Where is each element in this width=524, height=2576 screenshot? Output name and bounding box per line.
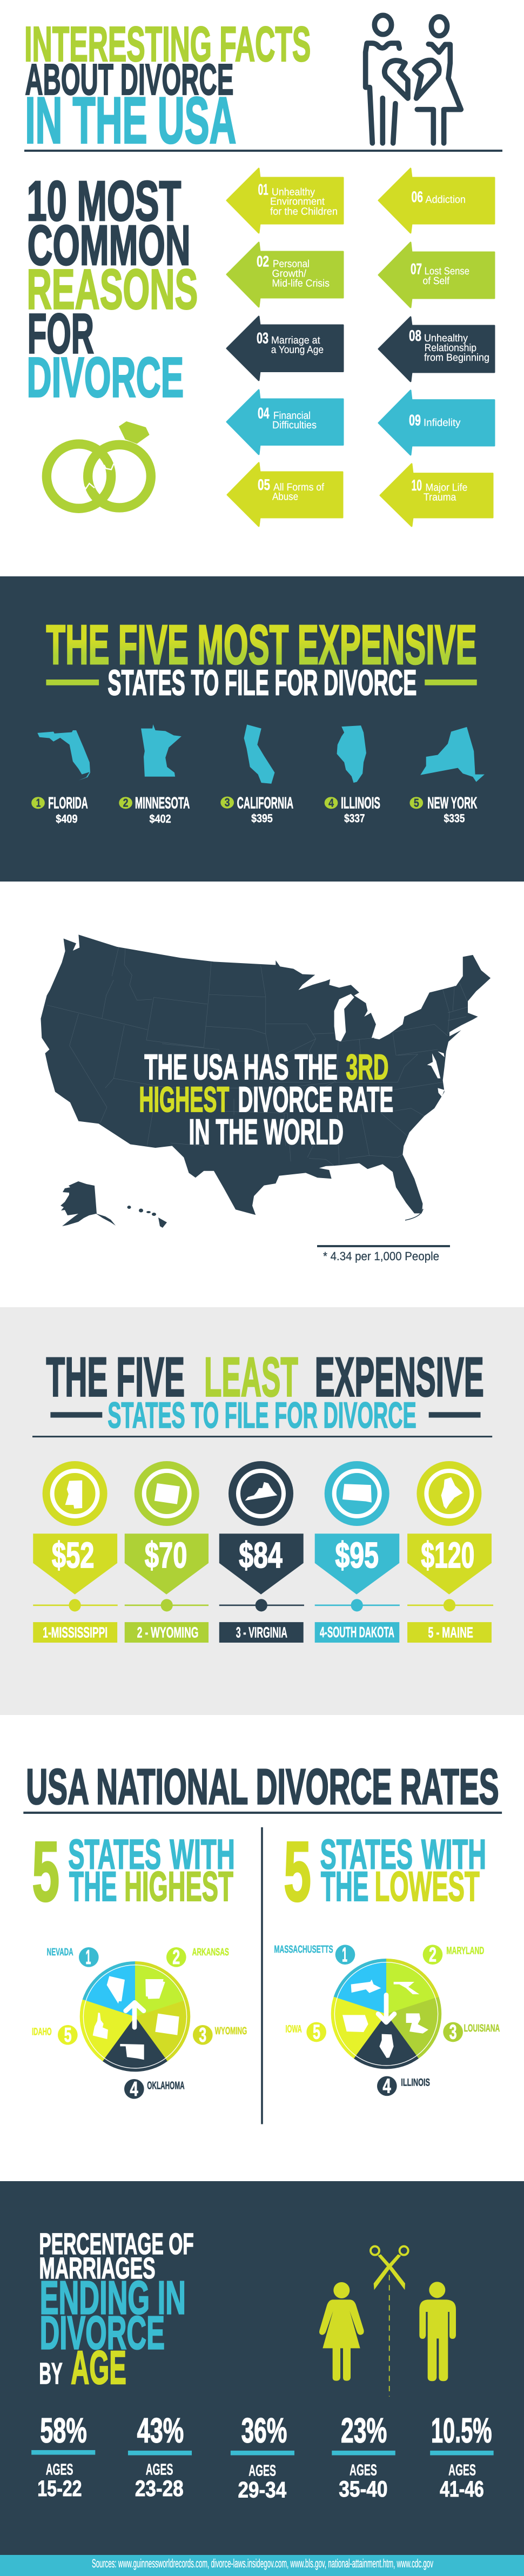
column: Virginia: 3 - VIRGINIA xyxy=(236,1624,287,1641)
legend: Wyoming: WYOMING xyxy=(215,2025,247,2036)
legend: Iowa xyxy=(285,2021,326,2043)
heading: 5 states with the lowest xyxy=(284,1824,486,1919)
heading: 10 most common reasons for divorce: FOR xyxy=(28,302,94,365)
state: Florida xyxy=(31,730,90,825)
state: Illinois: 4 xyxy=(328,796,334,809)
heading: 5 states with the highest xyxy=(32,1824,235,1919)
chart: lowest rate states wheel xyxy=(274,1943,500,2097)
icon: woman xyxy=(319,2282,364,2381)
arrow 04: Difficulties xyxy=(272,420,317,431)
stat: ages 15-22: 58% xyxy=(40,2411,87,2450)
arrow 09: Infidelity xyxy=(424,418,461,429)
panel: USA map xyxy=(41,934,491,1263)
panel: 10 most common reasons: REASONS xyxy=(26,258,198,321)
legend: Iowa: 5 xyxy=(313,2021,320,2043)
stat: ages 41-46: AGES xyxy=(448,2461,476,2479)
arrow 02 xyxy=(227,243,343,307)
heading: the five least expensive: THE FIVE xyxy=(46,1346,185,1408)
state: New York: 5 xyxy=(414,796,419,809)
stat: ages 23-28 xyxy=(128,2411,192,2501)
heading: the five most expensive xyxy=(46,613,477,703)
footer: sources xyxy=(0,2555,524,2576)
map callout text: HIGHEST xyxy=(139,1080,229,1119)
panel: percentage of marriages ending in divorce by age xyxy=(0,2181,524,2555)
legend: Illinois: ILLINOIS xyxy=(401,2076,430,2088)
column: Virginia: $84 xyxy=(239,1535,283,1575)
icon: broken wedding rings xyxy=(46,421,151,508)
heading: 5 states with the highest: STATES xyxy=(68,1831,161,1878)
arrow 06: Addiction xyxy=(426,194,466,206)
legend: Arkansas: 2 xyxy=(172,1946,180,1968)
legend: Nevada: NEVADA xyxy=(47,1946,73,1958)
heading: the five least expensive xyxy=(32,1346,492,1437)
panel: five least expensive states xyxy=(0,1307,524,1715)
arrow 02: 02 xyxy=(257,253,269,270)
arrow 02: Personal xyxy=(273,259,310,270)
column: Mississippi xyxy=(33,1461,118,1643)
state: Minnesota xyxy=(119,724,190,825)
panel: five most expensive states xyxy=(0,576,524,882)
panel: 10 most common reasons: 10 MOST xyxy=(26,170,181,232)
arrow 04 xyxy=(227,390,343,454)
legend: Nevada xyxy=(47,1946,99,1968)
legend: Iowa: IOWA xyxy=(285,2023,302,2035)
state: California: $395 xyxy=(251,812,273,825)
arrow 01: Unhealthy xyxy=(272,186,315,198)
map callout text xyxy=(139,1047,393,1152)
heading: percentage of marriages: DIVORCE xyxy=(40,2306,165,2359)
legend: Illinois xyxy=(377,2075,430,2097)
panel: national divorce rates: HIGHEST xyxy=(124,1863,233,1910)
state: Illinois xyxy=(325,725,380,825)
panel: 10 most common reasons xyxy=(26,169,494,526)
legend: Louisiana: 3 xyxy=(449,2021,457,2043)
heading: 5 states with the lowest: 5 xyxy=(284,1824,311,1919)
column: Wyoming xyxy=(125,1461,209,1643)
icon: scissors xyxy=(371,2247,408,2397)
panel: national divorce rates: WITH xyxy=(170,1831,235,1878)
stat: ages 35-40: 35-40 xyxy=(339,2477,388,2501)
column: Virginia xyxy=(219,1461,304,1643)
arrow 10: Major Life xyxy=(426,482,467,494)
panel: percentage of marriages ending in divorce by age: PERCENTAGE OF xyxy=(39,2227,194,2261)
arrow 10: 10 xyxy=(412,477,422,494)
stat: ages 41-46: 41-46 xyxy=(440,2477,484,2501)
column: Mississippi: $52 xyxy=(52,1535,94,1575)
arrow 03: 03 xyxy=(257,329,268,347)
legend: Idaho: 5 xyxy=(64,2023,72,2046)
icon: man xyxy=(419,2282,456,2381)
legend: Nevada: 1 xyxy=(85,1946,91,1968)
legend: Oklahoma xyxy=(124,2077,185,2100)
heading: USA national divorce rates xyxy=(23,1759,502,2124)
stat: ages 23-28: AGES xyxy=(146,2460,173,2478)
state: Florida: $409 xyxy=(56,812,78,825)
state: Minnesota: 2 xyxy=(123,796,129,809)
arrow 07: of Self xyxy=(422,275,450,287)
panel: five least expensive states: 4-SOUTH DAKOTA xyxy=(320,1624,394,1640)
heading: percentage of marriages: MARRIAGES xyxy=(39,2251,156,2285)
title xyxy=(24,16,311,157)
stat: ages 35-40: AGES xyxy=(350,2461,377,2479)
arrow 07 xyxy=(379,243,494,307)
map: Florida keys curve xyxy=(405,1209,423,1220)
state: New York: $335 xyxy=(444,812,465,825)
state: California xyxy=(220,724,293,825)
heading: the five least expensive: LEAST xyxy=(204,1346,298,1408)
stats by age xyxy=(31,2411,494,2502)
column: South Dakota: $95 xyxy=(335,1535,379,1575)
heading: 5 states with the highest: THE xyxy=(69,1863,117,1910)
arrow 01 xyxy=(227,169,343,233)
stat: ages 29-34: 36% xyxy=(241,2411,287,2450)
stat: ages 15-22 xyxy=(31,2411,95,2501)
legend: Wyoming xyxy=(193,2023,247,2046)
stat: ages 41-46 xyxy=(430,2411,494,2501)
legend: Oklahoma: 4 xyxy=(130,2077,138,2100)
state maps and costs xyxy=(31,724,485,825)
header panel xyxy=(24,15,502,157)
column: Wyoming: 2 - WYOMING xyxy=(137,1624,198,1641)
arrow 10: Trauma xyxy=(424,492,456,503)
state maps and costs: ILLINOIS xyxy=(341,794,380,812)
stat: ages 15-22: AGES xyxy=(46,2460,73,2478)
heading: 10 most common reasons for divorce xyxy=(26,170,198,409)
state: California: 3 xyxy=(225,796,230,809)
heading: percentage of marriages: BY xyxy=(39,2357,63,2390)
arrow 08: Relationship xyxy=(425,342,476,354)
legend: Massachusetts xyxy=(274,1943,355,1966)
arrow 10 xyxy=(380,464,493,526)
state maps and costs: MINNESOTA xyxy=(135,794,190,812)
heading: percentage of marriages: AGE xyxy=(71,2341,126,2394)
stat: ages 23-28: 43% xyxy=(137,2411,184,2450)
panel: 10 most common reasons: COMMON xyxy=(28,214,191,277)
legend: Maryland: 2 xyxy=(429,1943,436,1966)
legend: Arkansas: ARKANSAS xyxy=(192,1946,229,1958)
legend: Maryland: MARYLAND xyxy=(446,1945,484,1956)
stat: ages 29-34 xyxy=(231,2411,294,2502)
arrow 04: 04 xyxy=(258,405,270,422)
state: Florida: 1 xyxy=(36,796,41,809)
legend: Wyoming: 3 xyxy=(199,2023,206,2046)
arrow 01: for the Children xyxy=(270,206,338,217)
stat: ages 29-34: AGES xyxy=(248,2461,276,2479)
stat: ages 35-40 xyxy=(332,2411,395,2501)
state: Minnesota: $402 xyxy=(150,812,171,825)
map: contiguous USA xyxy=(41,934,491,1215)
column: South Dakota xyxy=(315,1461,400,1643)
heading: 5 states with the highest: 5 xyxy=(32,1824,59,1919)
map: Hawaii xyxy=(127,1206,167,1228)
state maps and costs: FLORIDA xyxy=(48,794,88,812)
stat: ages 23-28: 23-28 xyxy=(135,2476,184,2501)
arrow 03: a Young Age xyxy=(271,344,324,355)
arrow 07: 07 xyxy=(411,260,422,278)
column: Wyoming: $70 xyxy=(145,1535,187,1575)
arrow 05: All Forms of xyxy=(273,482,325,493)
heading: percentage of marriages xyxy=(39,2227,194,2394)
arrow 09: 09 xyxy=(409,412,421,429)
arrow 06: 06 xyxy=(412,189,423,206)
arrow 05: Abuse xyxy=(272,492,298,503)
legend: Louisiana xyxy=(443,2021,500,2043)
arrow 05: 05 xyxy=(258,476,270,494)
legend: Oklahoma: OKLAHOMA xyxy=(147,2079,185,2091)
arrow 05 xyxy=(227,463,342,526)
legend: Arkansas xyxy=(166,1946,229,1968)
panel: percentage of marriages ending in divorce by age: ENDING IN xyxy=(40,2271,186,2324)
arrow 09 xyxy=(379,391,494,455)
state maps and costs: CALIFORNIA xyxy=(237,794,293,812)
legend: Maryland xyxy=(423,1943,484,1966)
legend: Massachusetts: 1 xyxy=(342,1943,347,1966)
stat: ages 29-34: 29-34 xyxy=(238,2477,286,2502)
arrow 08 xyxy=(379,317,494,381)
legend: Idaho xyxy=(32,2023,78,2046)
legend: Illinois: 4 xyxy=(382,2075,391,2097)
legend: Massachusetts: MASSACHUSETTS xyxy=(274,1943,333,1955)
arrow 01: 01 xyxy=(258,181,268,199)
state: Illinois: $337 xyxy=(344,812,365,825)
arrow 06 xyxy=(379,169,494,233)
arrow 07: Lost Sense xyxy=(425,266,469,277)
map: contiguous USA: 3RD xyxy=(346,1047,388,1087)
arrow 08: 08 xyxy=(409,327,421,345)
legend: Louisiana: LOUISIANA xyxy=(464,2022,500,2034)
stat: ages 35-40: 23% xyxy=(341,2411,387,2450)
panel: national divorce rates xyxy=(23,1759,502,2124)
column: Maine xyxy=(407,1461,493,1643)
arrow 03 xyxy=(227,317,343,380)
arrow 03: Marriage at xyxy=(271,335,320,346)
column: Maine: 5 - MAINE xyxy=(428,1624,473,1641)
icon: couple with broken heart xyxy=(366,15,461,143)
heading: 5 states with the lowest: THE xyxy=(321,1863,368,1910)
arrow 04: Financial xyxy=(273,410,311,421)
icon: couple separated by scissors xyxy=(319,2247,456,2397)
chart: highest rate states wheel xyxy=(32,1946,247,2100)
column: Mississippi: 1-MISSISSIPPI xyxy=(43,1624,108,1641)
arrow 08: Unhealthy xyxy=(424,333,468,344)
stat: ages 15-22: 15-22 xyxy=(37,2476,82,2501)
arrow 02: Growth/ xyxy=(272,268,307,279)
arrow 01: Environment xyxy=(270,196,325,207)
arrow 02: Mid-life Crisis xyxy=(272,278,330,290)
panel: 10 most common reasons: DIVORCE xyxy=(26,346,184,409)
map: Alaska xyxy=(61,1181,116,1226)
legend: Idaho: IDAHO xyxy=(32,2026,52,2037)
state: New York xyxy=(409,727,485,825)
footnote: * 4.34 per 1,000 People xyxy=(323,1249,439,1263)
arrow 08: from Beginning xyxy=(424,352,489,364)
